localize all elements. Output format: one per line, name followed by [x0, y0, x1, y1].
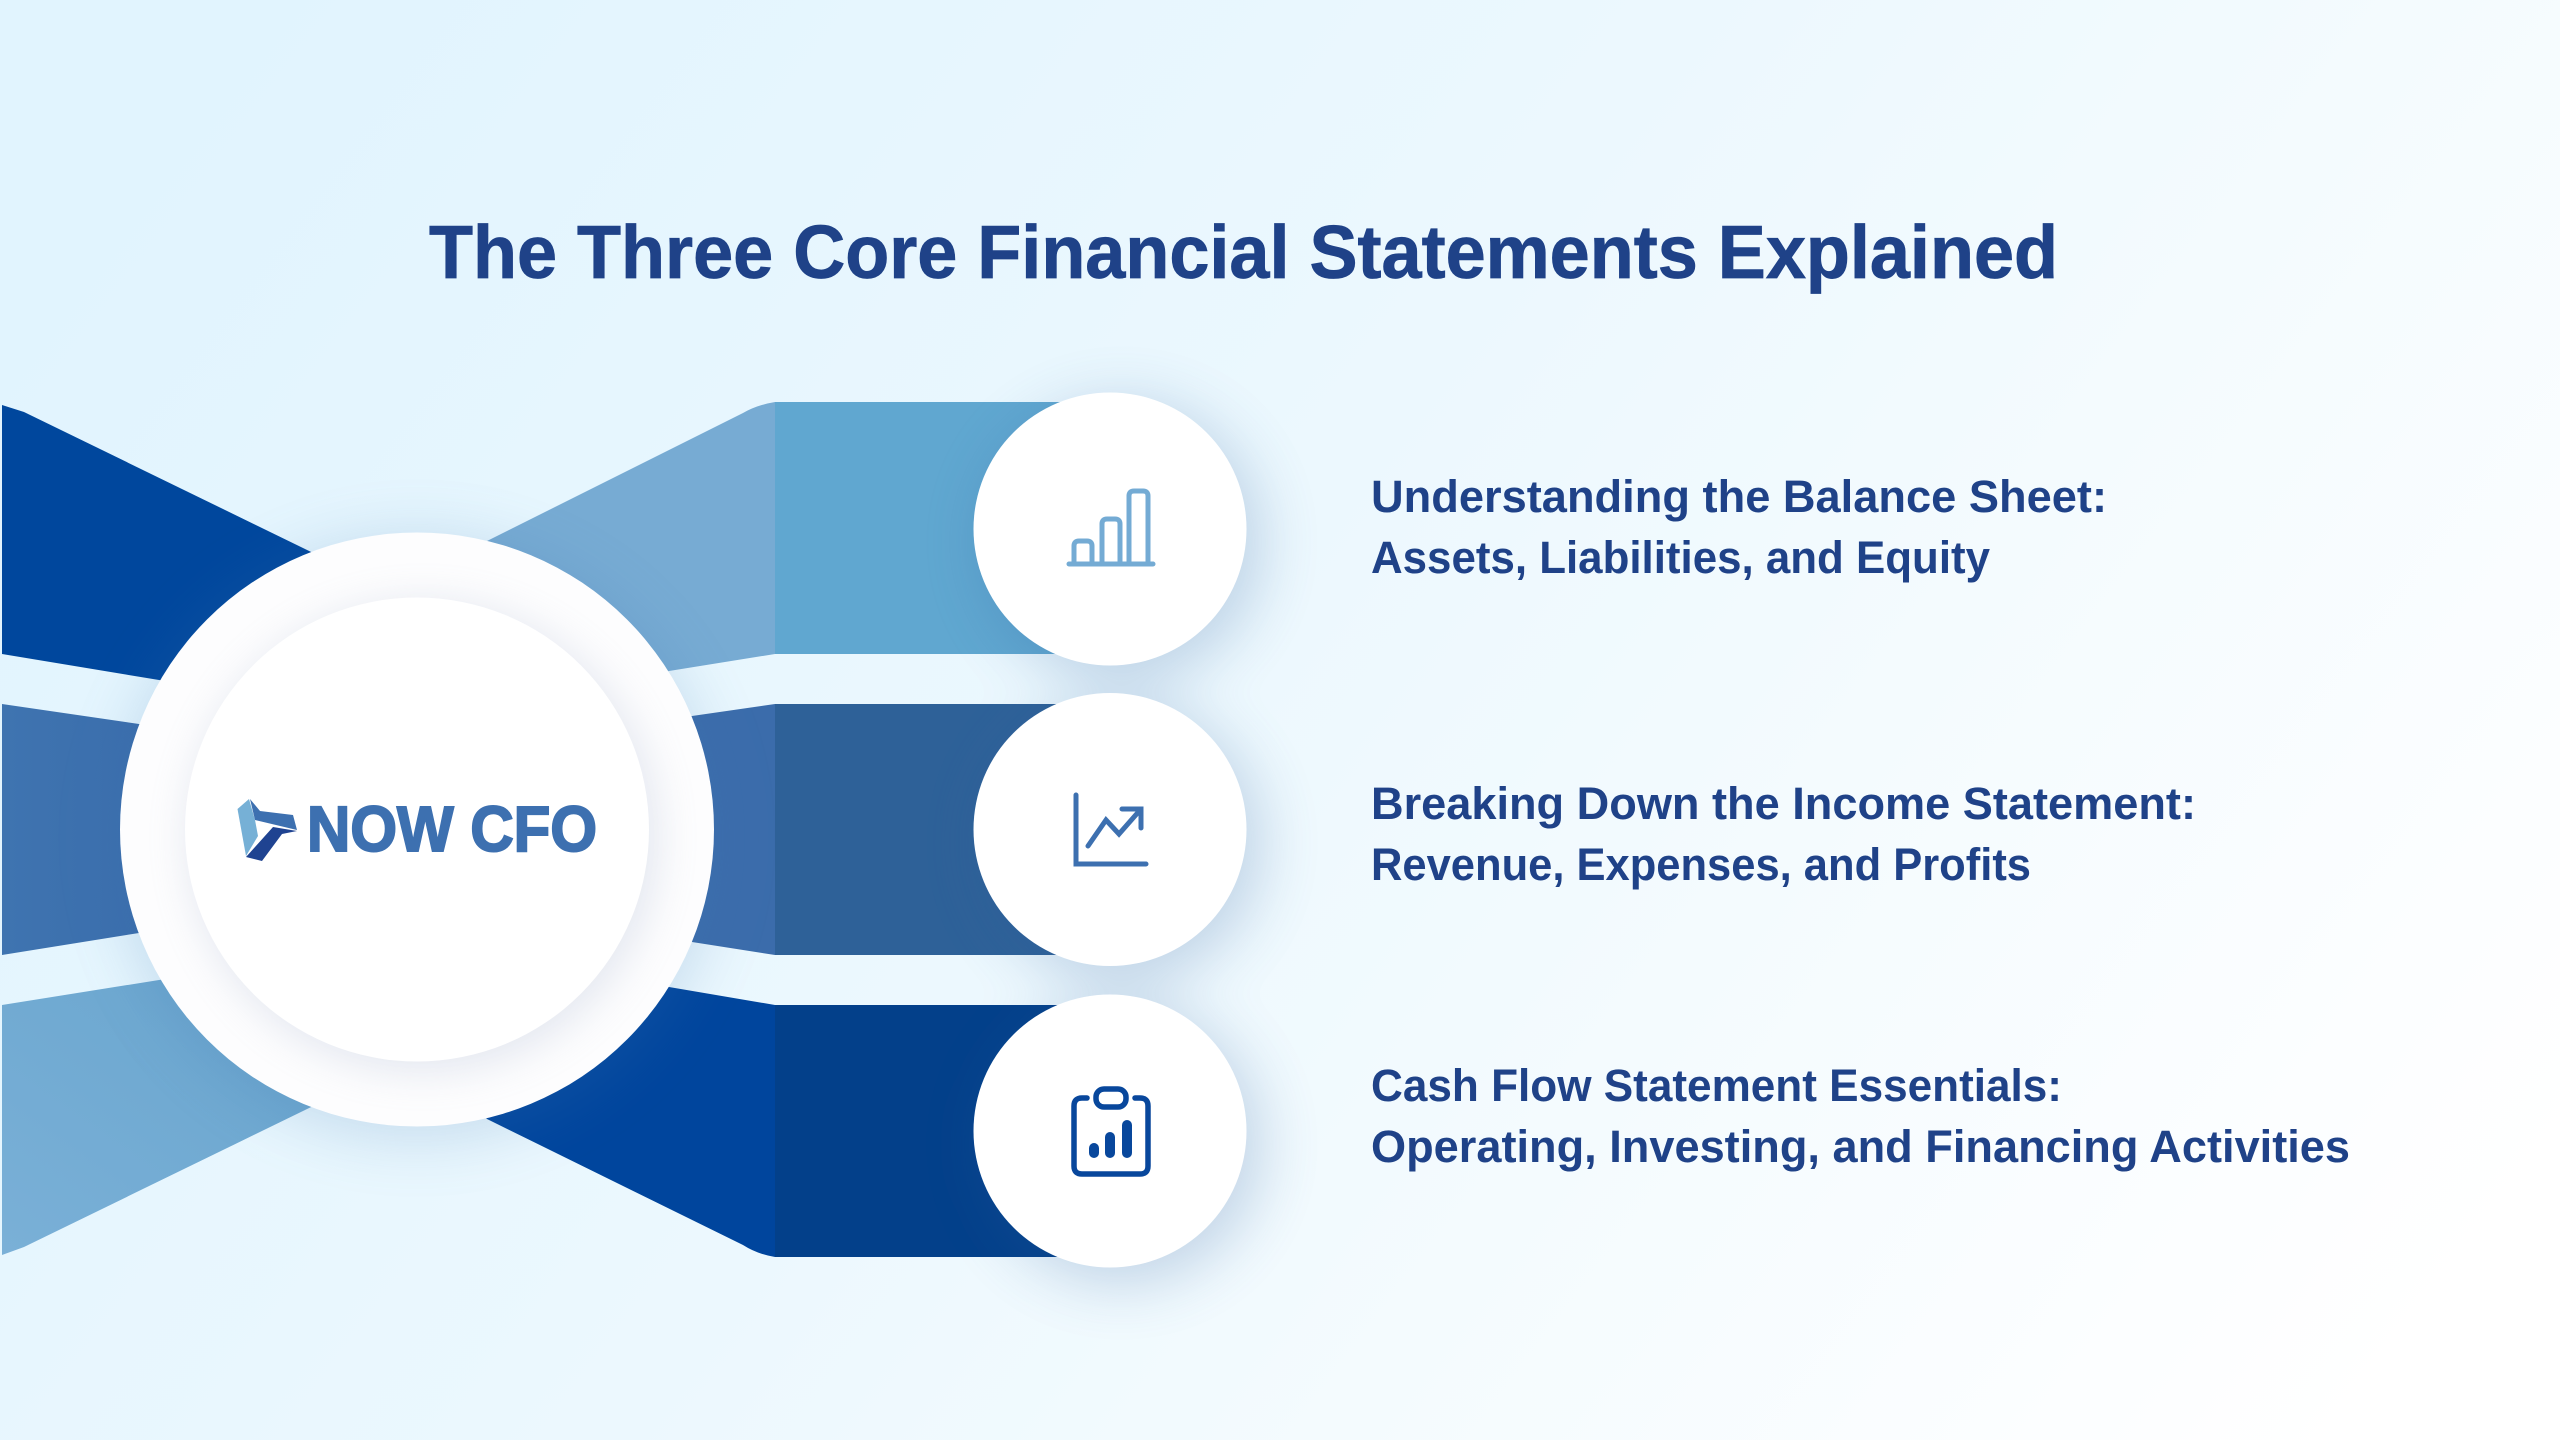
- ribbon: middle left: [2, 704, 300, 955]
- icon: line chart: [1076, 795, 1146, 864]
- ribbon: bottom right connector: [400, 960, 775, 1257]
- diagram: ribbons, hub and icons: [2, 392, 1262, 1284]
- text block: income statement: Revenue, Expenses, and Profits: [1371, 839, 2031, 890]
- bar: middle: [775, 704, 1115, 955]
- text block: balance sheet: Assets, Liabilities, and Equity: [1371, 532, 1990, 583]
- ribbon: top right connector: [400, 402, 775, 700]
- logo mark: [238, 799, 297, 861]
- text block: income statement: [1371, 778, 2196, 890]
- bar: bottom: [775, 1005, 1115, 1257]
- icon circle: top: [974, 392, 1246, 666]
- title: The Three Core Financial Statements Explained: [429, 210, 2058, 294]
- icon circle: bottom: [974, 994, 1246, 1268]
- hub shadow: [115, 536, 719, 1140]
- text block: cash flow statement: [1371, 1060, 2350, 1172]
- text block: cash flow statement: Cash Flow Statement Essentials:: [1371, 1060, 2062, 1111]
- icon: clipboard chart: [1074, 1089, 1148, 1174]
- icon: bar chart: [1069, 491, 1153, 564]
- icon circle: middle: [974, 693, 1246, 966]
- text block: income statement: Breaking Down the Income Statement:: [1371, 778, 2196, 829]
- text block: balance sheet: [1371, 471, 2107, 583]
- hub: inner disc: [185, 598, 649, 1062]
- bar: top: [775, 402, 1115, 654]
- hub: inner shadow glow: [187, 601, 659, 1073]
- text block: balance sheet: Understanding the Balance Sheet:: [1371, 471, 2107, 522]
- ribbon: middle right connector: [560, 704, 775, 955]
- logo wordmark: NOW CFO: [307, 793, 597, 865]
- icon circle shadows: [982, 402, 1262, 1284]
- text block: cash flow statement: Operating, Investing, and Financing Activities: [1371, 1121, 2350, 1172]
- ribbon: top left: [2, 405, 420, 700]
- ribbon: bottom left: [2, 960, 420, 1255]
- hub: outer ring: [120, 532, 714, 1126]
- logo: NOW CFO: [238, 793, 597, 865]
